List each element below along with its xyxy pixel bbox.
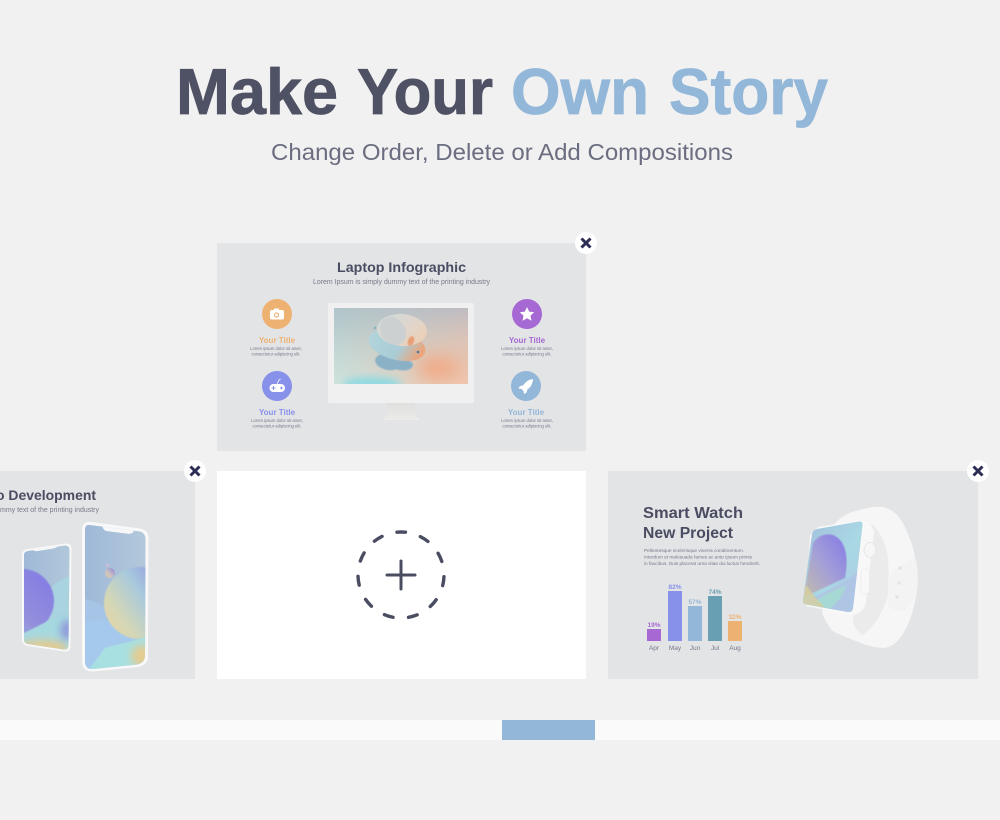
bar chart xyxy=(647,584,742,652)
icon: monitor with abstract artwork xyxy=(328,303,474,403)
label: your title controller: Lorem ipsum dolor sit amet, xyxy=(251,418,303,423)
body text: in faucibus. Duis placerat urna vitae dui luctus hendrerit. xyxy=(644,561,760,567)
panel heading: smart watch new project xyxy=(643,505,743,542)
button: close laptop panel xyxy=(575,232,597,254)
bar chart: 57% xyxy=(688,599,702,606)
label: your title camera: Your Title xyxy=(259,336,296,345)
label: your title rocket: Lorem ipsum dolor sit amet, xyxy=(501,418,553,423)
icon: star xyxy=(512,299,542,329)
label: your title rocket: consectetur adipiscing elit. xyxy=(502,424,552,428)
title xyxy=(176,55,828,128)
label: your title star: Lorem ipsum dolor sit amet, xyxy=(501,346,553,351)
panel: laptop infographic xyxy=(217,243,586,451)
panel: smart watch xyxy=(608,471,978,679)
scrollbar xyxy=(0,720,1000,740)
label: your title rocket: Your Title xyxy=(508,408,545,417)
label: your title star xyxy=(501,336,553,356)
body text: Pellentesque scelerisque viverra condimentum. xyxy=(644,548,744,554)
bar chart: Jun xyxy=(690,645,701,652)
bar chart: Aug xyxy=(729,645,741,652)
bar chart: 19% xyxy=(647,622,661,629)
body text: Interdum et malesuada fames ac ante ipsum primis xyxy=(644,554,753,560)
label: your title camera: consectetur adipiscing elit. xyxy=(251,352,301,356)
bar chart: May xyxy=(669,645,682,652)
panel subheading: mmy text of the printing industry xyxy=(0,507,99,514)
panel subheading: Lorem Ipsum is simply dummy text of the printing industry xyxy=(313,279,490,286)
label: your title controller: Your Title xyxy=(259,408,296,417)
bar chart: Apr xyxy=(649,645,660,652)
title: Your xyxy=(357,55,493,128)
body text xyxy=(644,548,760,567)
label: your title controller xyxy=(251,408,303,428)
icon: camera xyxy=(262,299,292,329)
icon: game controller xyxy=(262,371,292,401)
icon: large phone xyxy=(82,522,148,672)
label: your title star: consectetur adipiscing elit. xyxy=(502,352,552,356)
bar chart: 74% xyxy=(708,589,722,596)
label: your title camera: Lorem ipsum dolor sit amet, xyxy=(250,346,302,351)
icon: dashed circle with plus xyxy=(358,532,444,618)
panel: add new composition xyxy=(217,471,586,679)
subtitle: Change Order, Delete or Add Compositions xyxy=(271,139,733,165)
label: your title rocket xyxy=(501,408,553,428)
panel heading: smart watch new project: Smart Watch xyxy=(643,505,743,522)
bar chart: Jul xyxy=(711,645,720,652)
bar chart: 32% xyxy=(728,614,742,621)
title: Own xyxy=(511,55,649,128)
icon: rocket xyxy=(511,371,541,401)
panel heading: smart watch new project: New Project xyxy=(643,525,734,542)
panel: phone development xyxy=(0,471,195,679)
button: close phone panel xyxy=(184,460,206,482)
panel heading: laptop infographic: Laptop Infographic xyxy=(337,259,466,275)
button: close watch panel xyxy=(967,460,989,482)
title: Story xyxy=(669,55,828,128)
title: Make xyxy=(176,55,338,128)
icon: small phone xyxy=(22,544,72,652)
label: your title camera xyxy=(250,336,302,356)
bar chart: 82% xyxy=(668,584,682,591)
label: your title controller: consectetur adipiscing elit. xyxy=(252,424,302,428)
icon: smart watch xyxy=(802,507,918,648)
label: your title star: Your Title xyxy=(509,336,546,345)
